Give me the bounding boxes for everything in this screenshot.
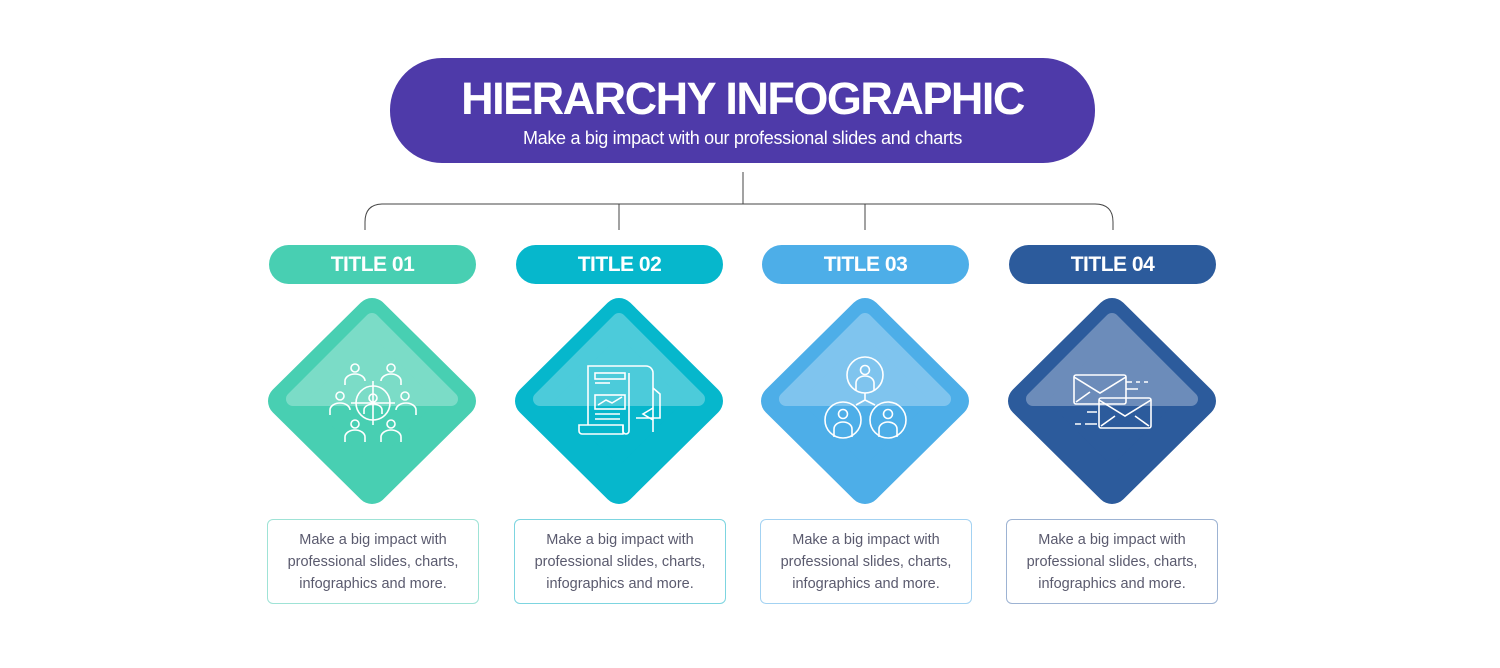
title pills	[269, 245, 476, 284]
title pills: TITLE 01	[331, 253, 414, 276]
text box 4: Make a big impact with professional slides, charts, infographics and more.	[1027, 532, 1197, 592]
text: TITLE 02	[578, 253, 661, 276]
text box 3	[760, 519, 972, 604]
diamond 3	[777, 314, 953, 488]
diamond 4	[1024, 314, 1200, 488]
icon: envelopes	[1074, 375, 1151, 428]
text box 1	[267, 519, 479, 604]
title: HIERARCHY INFOGRAPHIC	[461, 73, 1024, 124]
header banner	[390, 58, 1095, 163]
diamond 1	[284, 314, 460, 488]
icon: document report	[579, 366, 660, 434]
text box 2: Make a big impact with professional slides, charts, infographics and more.	[535, 532, 705, 592]
icon: people target	[330, 364, 416, 442]
icon: people network	[825, 357, 906, 438]
text box 1: Make a big impact with professional slides, charts, infographics and more.	[288, 532, 458, 592]
diamond 2	[531, 314, 707, 488]
text box 4	[1006, 519, 1218, 604]
text box 2	[514, 519, 726, 604]
text: TITLE 04	[1071, 253, 1154, 276]
subtitle: Make a big impact with our professional slides and charts	[523, 128, 962, 148]
text: TITLE 03	[824, 253, 907, 276]
text box 3: Make a big impact with professional slides, charts, infographics and more.	[781, 532, 951, 592]
